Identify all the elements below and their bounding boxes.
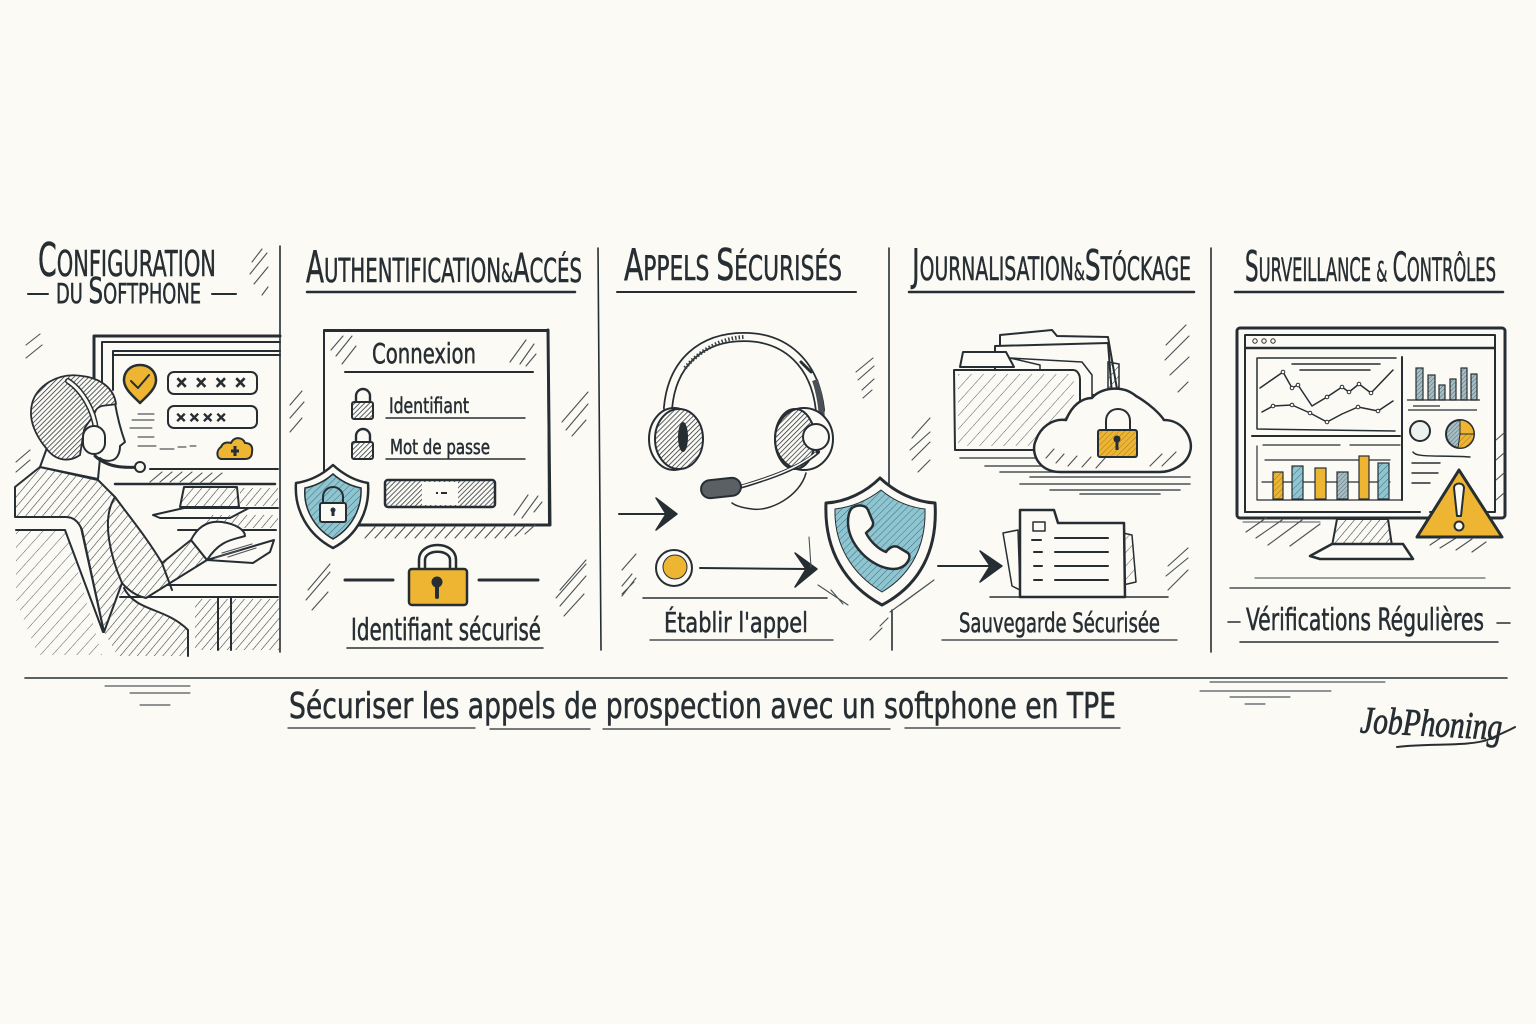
icon: yellow check shield — [124, 365, 156, 403]
icon: stacked folders — [954, 330, 1119, 450]
field mot de passe: Mot de passe — [390, 435, 490, 459]
dialog title: Connexion — [372, 337, 476, 370]
password field two: ×××× — [176, 408, 226, 427]
caption: établir l'appel: Établir l'appel — [664, 605, 808, 639]
torso and arm — [15, 467, 207, 632]
icon: lock identifiant — [352, 389, 373, 419]
gauge circle — [1410, 421, 1430, 441]
panel: surveillance et contrôles — [1228, 242, 1510, 642]
monitor with login fields — [94, 336, 280, 650]
neck and face — [40, 394, 125, 479]
padlock in cloud — [1098, 409, 1137, 457]
hatched shadow under dialog — [365, 525, 535, 538]
panel: authentification et accès — [290, 242, 588, 648]
arrow: to document — [938, 551, 1002, 582]
heading: configuration du softphone: CONFIGURATION — [38, 233, 216, 287]
chair — [16, 523, 104, 655]
headband — [668, 337, 822, 425]
arrow: entry — [619, 498, 677, 530]
hatching decoration — [910, 325, 1189, 590]
icon: cloud with lock — [1034, 389, 1191, 472]
icon: shield with phone — [809, 478, 935, 640]
heading: appels sécurisés: APPELS SÉCURISÉS — [624, 240, 842, 291]
icon: warning triangle — [1417, 470, 1502, 537]
right ear cup — [775, 408, 833, 470]
icon: phone handset — [848, 506, 909, 569]
pie chart — [1446, 420, 1474, 448]
window top bar — [1246, 339, 1494, 348]
panel: journalisation et stockage — [909, 240, 1194, 640]
hatching decoration — [622, 358, 874, 596]
bar chart: bottom — [1257, 445, 1402, 500]
icon: headset — [649, 337, 833, 509]
password field one: × × × × — [176, 373, 246, 394]
headset on head — [68, 381, 145, 472]
icon: dashboard monitor — [1237, 328, 1505, 559]
monitor stand — [153, 487, 249, 518]
footer rule lines — [25, 678, 1507, 705]
hand — [191, 522, 245, 560]
login dialog — [324, 330, 550, 525]
login button — [385, 480, 495, 507]
panel: configuration du softphone — [15, 233, 280, 656]
left ear cup — [649, 408, 703, 470]
panel: appels sécurisés — [617, 240, 935, 640]
desk — [195, 597, 280, 650]
caption: sauvegarde sécurisée: Sauvegarde Sécurisée — [959, 608, 1160, 639]
monitor stand — [1310, 519, 1413, 559]
microphone boom — [700, 452, 818, 509]
caption: identifiant sécurisé: Identifiant sécurisé — [351, 613, 541, 648]
icon: shield with padlock — [296, 465, 368, 548]
heading: authentification et accès: AUTHENTIFICATION&ACCÉS — [306, 242, 582, 293]
arrow: to shield — [700, 553, 817, 587]
icon: yellow cloud lock — [217, 438, 252, 459]
heading: configuration du softphone — [28, 233, 236, 312]
lap — [104, 588, 188, 656]
hatching decoration — [290, 391, 588, 616]
hair — [31, 375, 116, 460]
hatching decoration — [16, 249, 268, 472]
keyboard — [207, 540, 274, 563]
field identifiant: Identifiant — [389, 394, 469, 418]
icon: yellow button — [656, 550, 692, 586]
icon: document — [990, 510, 1168, 597]
password field two — [168, 406, 257, 428]
line chart — [1257, 358, 1396, 431]
field identifiant — [386, 394, 525, 418]
shadow under cloud — [960, 458, 1190, 494]
bar chart: top right — [1407, 368, 1480, 410]
person with headset — [15, 375, 274, 656]
icon: lock mot de passe — [352, 429, 373, 459]
panel dividers — [280, 246, 1211, 652]
heading: journalisation et stockage: JOURNALISATION&STÓCKAGE — [910, 240, 1191, 291]
icon: large yellow padlock — [345, 545, 538, 605]
main title: Sécuriser les appels de prospection avec un softphone en TPE — [289, 686, 1116, 727]
heading: configuration du softphone: DU SOFTPHONE — [56, 271, 201, 312]
